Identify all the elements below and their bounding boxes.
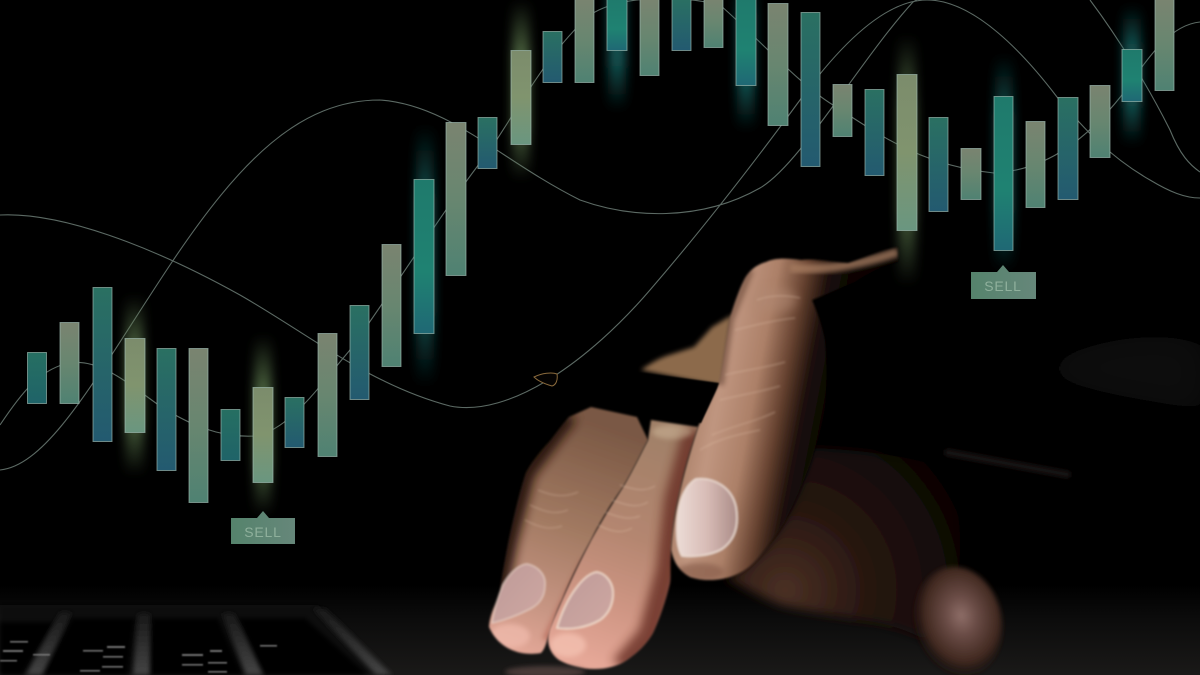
pen barrel beyond hand xyxy=(945,452,1070,475)
dark sleeve xyxy=(1040,337,1200,410)
lower hand in shadow xyxy=(725,448,960,640)
reflection on desk xyxy=(505,666,585,675)
sell tag: left: SELL xyxy=(244,524,282,540)
middle finger xyxy=(546,418,698,671)
pen xyxy=(534,372,1070,475)
desk surface xyxy=(0,585,1200,675)
back of hand behind pen xyxy=(641,315,732,386)
fingernail: ring xyxy=(492,564,545,623)
pen tip xyxy=(534,373,557,386)
laptop keyboard xyxy=(0,605,392,675)
sell tag: right xyxy=(971,265,1036,299)
candlestick chart xyxy=(28,0,1174,502)
trend curves xyxy=(0,0,1200,470)
fingernail: index xyxy=(677,479,737,556)
fingernail: middle xyxy=(557,572,613,629)
sell tag: right: SELL xyxy=(984,278,1022,294)
candle glows xyxy=(125,0,1141,515)
thumb tip xyxy=(903,558,1013,675)
ring finger xyxy=(488,406,648,656)
sell tag: left xyxy=(231,511,295,544)
index finger xyxy=(660,240,905,585)
